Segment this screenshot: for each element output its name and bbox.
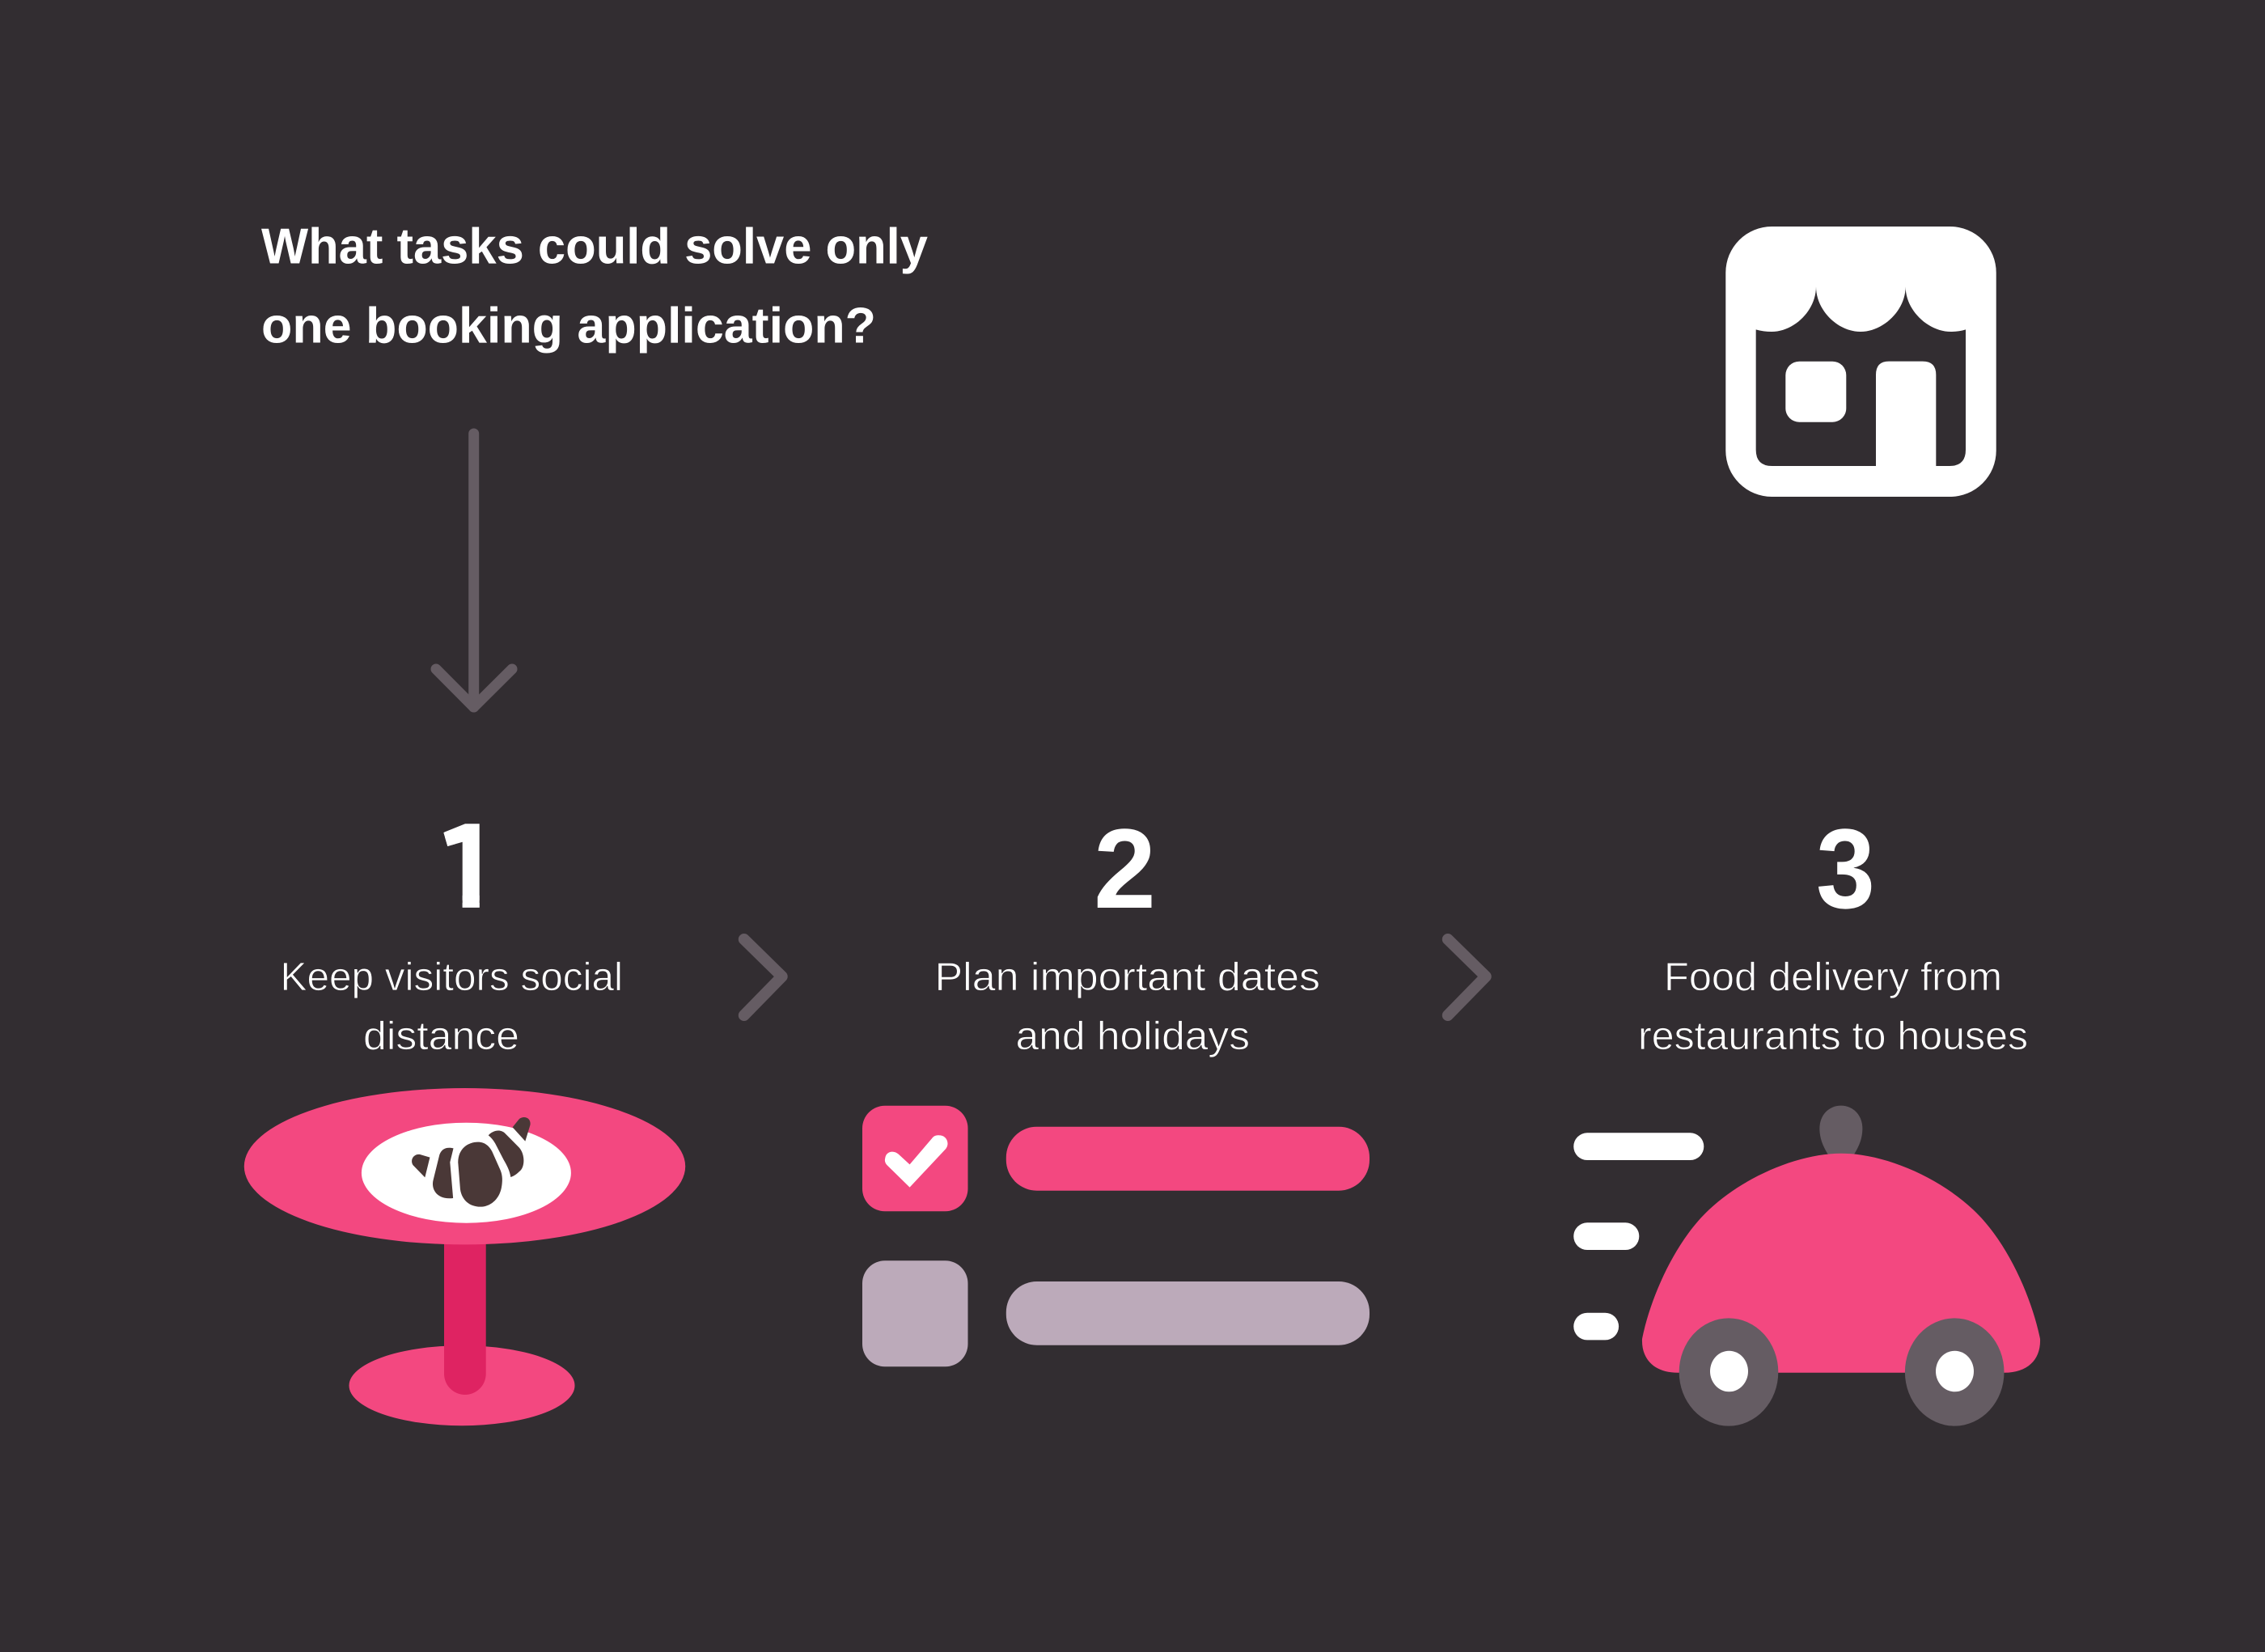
step 1 text: Keep visitors social xyxy=(280,955,623,999)
icon: croissant xyxy=(412,1117,531,1207)
icon: delivery car cloche xyxy=(1573,1106,2040,1426)
step 3 text: restaurants to houses xyxy=(1638,1014,2028,1058)
title xyxy=(261,218,929,354)
step 3 text xyxy=(1638,955,2028,1058)
icon: checklist xyxy=(862,1106,1370,1366)
title: one booking application? xyxy=(261,298,876,354)
step 1 number: 1 xyxy=(435,800,502,934)
step 2 number: 2 xyxy=(1094,805,1156,932)
arrow: chevron 2 to 3 xyxy=(1448,939,1486,1015)
icon: cafe table with croissant xyxy=(244,1088,685,1425)
infographic canvas xyxy=(244,227,2040,1426)
step 1 text: distance xyxy=(363,1014,519,1058)
arrow: long down arrow xyxy=(436,434,512,707)
title: What tasks could solve only xyxy=(261,218,929,275)
speed lines xyxy=(1573,1133,1704,1340)
step 2 text xyxy=(935,955,1320,1058)
icon: shop storefront xyxy=(1725,227,1996,497)
step 2 text: and holidays xyxy=(1016,1014,1250,1058)
arrow: chevron 1 to 2 xyxy=(744,939,782,1015)
step 2 text: Plan important dates xyxy=(935,955,1320,999)
step 1 text xyxy=(280,955,623,1058)
step 3 text: Food delivery from xyxy=(1664,955,2002,999)
step 3 number: 3 xyxy=(1816,805,1875,932)
